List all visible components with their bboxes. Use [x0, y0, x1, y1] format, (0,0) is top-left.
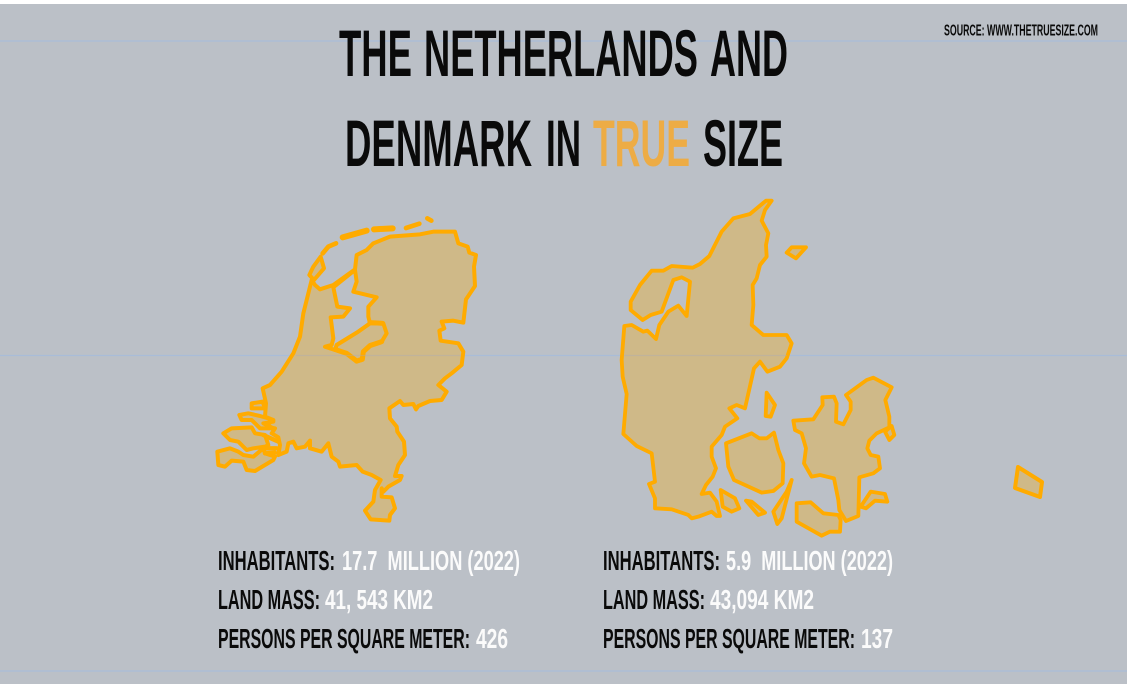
icon: Bornholm island: [1015, 467, 1042, 497]
small Danish islands: [721, 247, 894, 536]
stats: Netherlands: INHABITANTS:: [218, 545, 335, 576]
Wadden islands: [309, 218, 431, 280]
stats: Denmark: [603, 545, 893, 654]
Flevoland shore: [337, 323, 383, 361]
Zeeland islands: [217, 402, 278, 471]
stats: Denmark: INHABITANTS:: [603, 545, 720, 576]
title: NETHERLANDS: [424, 16, 698, 90]
map: Netherlands: [217, 218, 476, 521]
stats: Denmark: 5.9 MILLION (2022): [726, 545, 893, 576]
Zealand: [793, 378, 892, 521]
stats: Denmark: LAND MASS:: [603, 584, 705, 615]
title: THE: [339, 16, 412, 90]
Jutland: [622, 201, 792, 518]
title: [339, 16, 788, 180]
title: AND: [710, 16, 788, 90]
title: IN: [546, 106, 581, 180]
stats: Netherlands: [218, 545, 520, 654]
stats: Denmark: 43,094 KM2: [710, 584, 814, 615]
stats: Netherlands: PERSONS PER SQUARE METER:: [218, 623, 470, 654]
stats: Denmark: PERSONS PER SQUARE METER:: [603, 623, 855, 654]
water: IJsselmeer: [325, 270, 377, 350]
Funen: [726, 433, 783, 493]
map: Denmark: [622, 201, 894, 536]
title: TRUE: [593, 106, 690, 180]
Flevoland: [335, 323, 387, 362]
stats: Netherlands: LAND MASS:: [218, 584, 320, 615]
stats: Denmark: 137: [861, 623, 893, 654]
title: DENMARK: [345, 106, 532, 180]
stats: Netherlands: 426: [476, 623, 508, 654]
title: SIZE: [703, 106, 783, 180]
stats: Netherlands: 41, 543 KM2: [325, 584, 433, 615]
stats: Netherlands: 17.7 MILLION (2022): [342, 545, 520, 576]
